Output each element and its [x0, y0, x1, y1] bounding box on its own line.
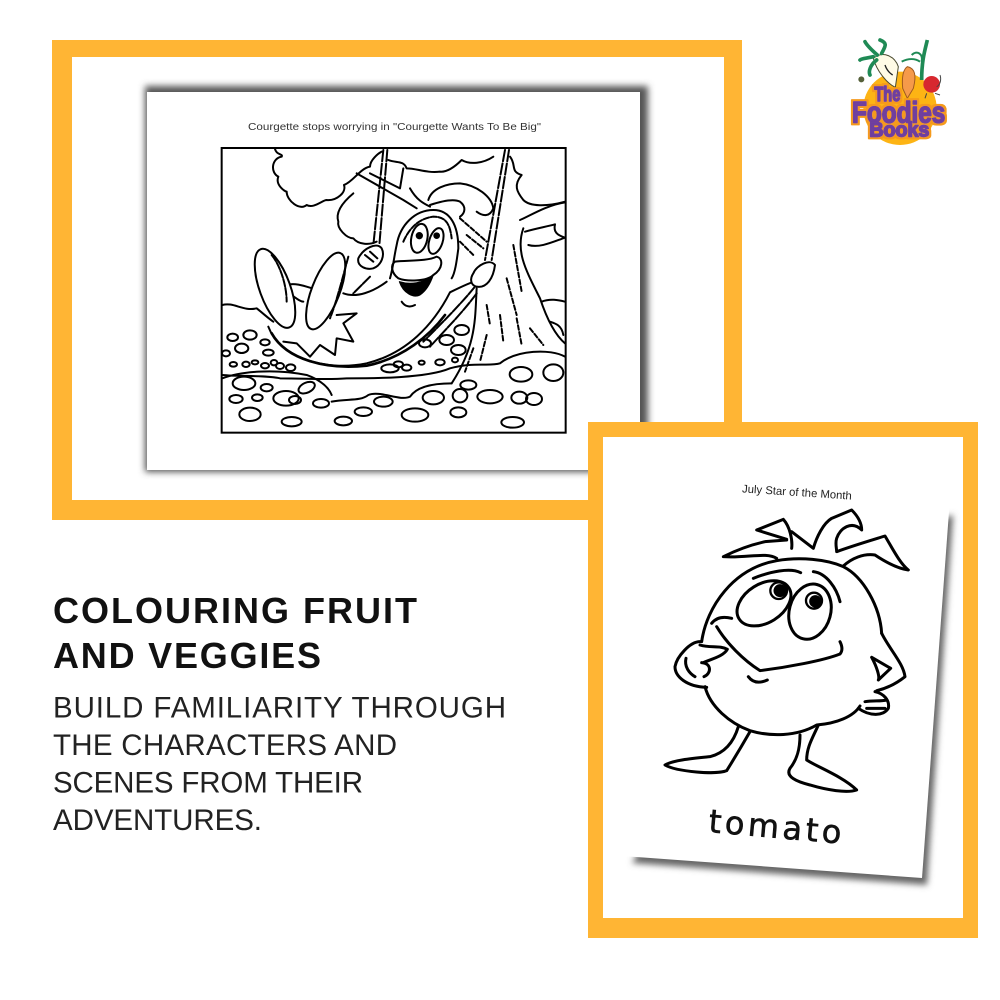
logo: leek	[922, 40, 927, 80]
panel: tomato colouring page frame	[588, 422, 978, 938]
logo: tomato	[923, 76, 940, 93]
logo: wordmark: Foodies	[852, 97, 945, 130]
body text: BUILD FAMILIARITY THROUGH	[53, 692, 506, 724]
logo: The Foodies Books	[852, 40, 945, 145]
logo: wordmark: The	[874, 84, 900, 106]
panel: courgette colouring page frame	[52, 40, 742, 520]
courgette body	[268, 282, 475, 366]
word: tomato: tomato	[707, 802, 843, 852]
pebbles and flowers	[227, 334, 238, 341]
illustration: tomato character	[665, 510, 908, 791]
body text	[53, 692, 506, 837]
logo: carrot	[902, 67, 915, 98]
heading: COLOURING FRUIT	[53, 590, 417, 631]
logo: wordmark	[852, 84, 945, 142]
body text: SCENES FROM THEIR	[53, 766, 363, 800]
heading: AND VEGGIES	[53, 635, 321, 676]
courgette hands	[358, 246, 383, 269]
caption: tomato sheet: July Star of the Month	[742, 483, 852, 503]
ground line and bushes	[222, 304, 273, 322]
ropes	[373, 150, 509, 260]
logo: bee	[858, 76, 864, 82]
tomato legs	[665, 727, 750, 773]
tree canopy	[273, 149, 382, 207]
body text: ADVENTURES.	[53, 804, 262, 837]
tomato leaves	[723, 510, 908, 570]
courgette face	[403, 217, 452, 242]
heading	[53, 590, 417, 676]
tomato body	[702, 559, 882, 642]
body text: THE CHARACTERS AND	[53, 729, 397, 762]
trunk	[521, 228, 565, 343]
panel: courgette colouring sheet	[145, 86, 648, 472]
tomato arm and hand	[675, 642, 727, 687]
tomato eyebrows	[753, 570, 840, 602]
tomato smile	[712, 617, 842, 682]
logo: wordmark: Books	[869, 120, 929, 142]
panel: tomato colouring sheet	[623, 478, 953, 885]
logo: parsnip character	[860, 40, 898, 87]
tomato eyes	[729, 571, 799, 635]
courgette legs	[246, 244, 304, 333]
illustration: courgette on a swing	[222, 148, 566, 433]
caption: courgette sheet: Courgette stops worrying in "Courgette Wants To Be Big"	[248, 122, 542, 133]
